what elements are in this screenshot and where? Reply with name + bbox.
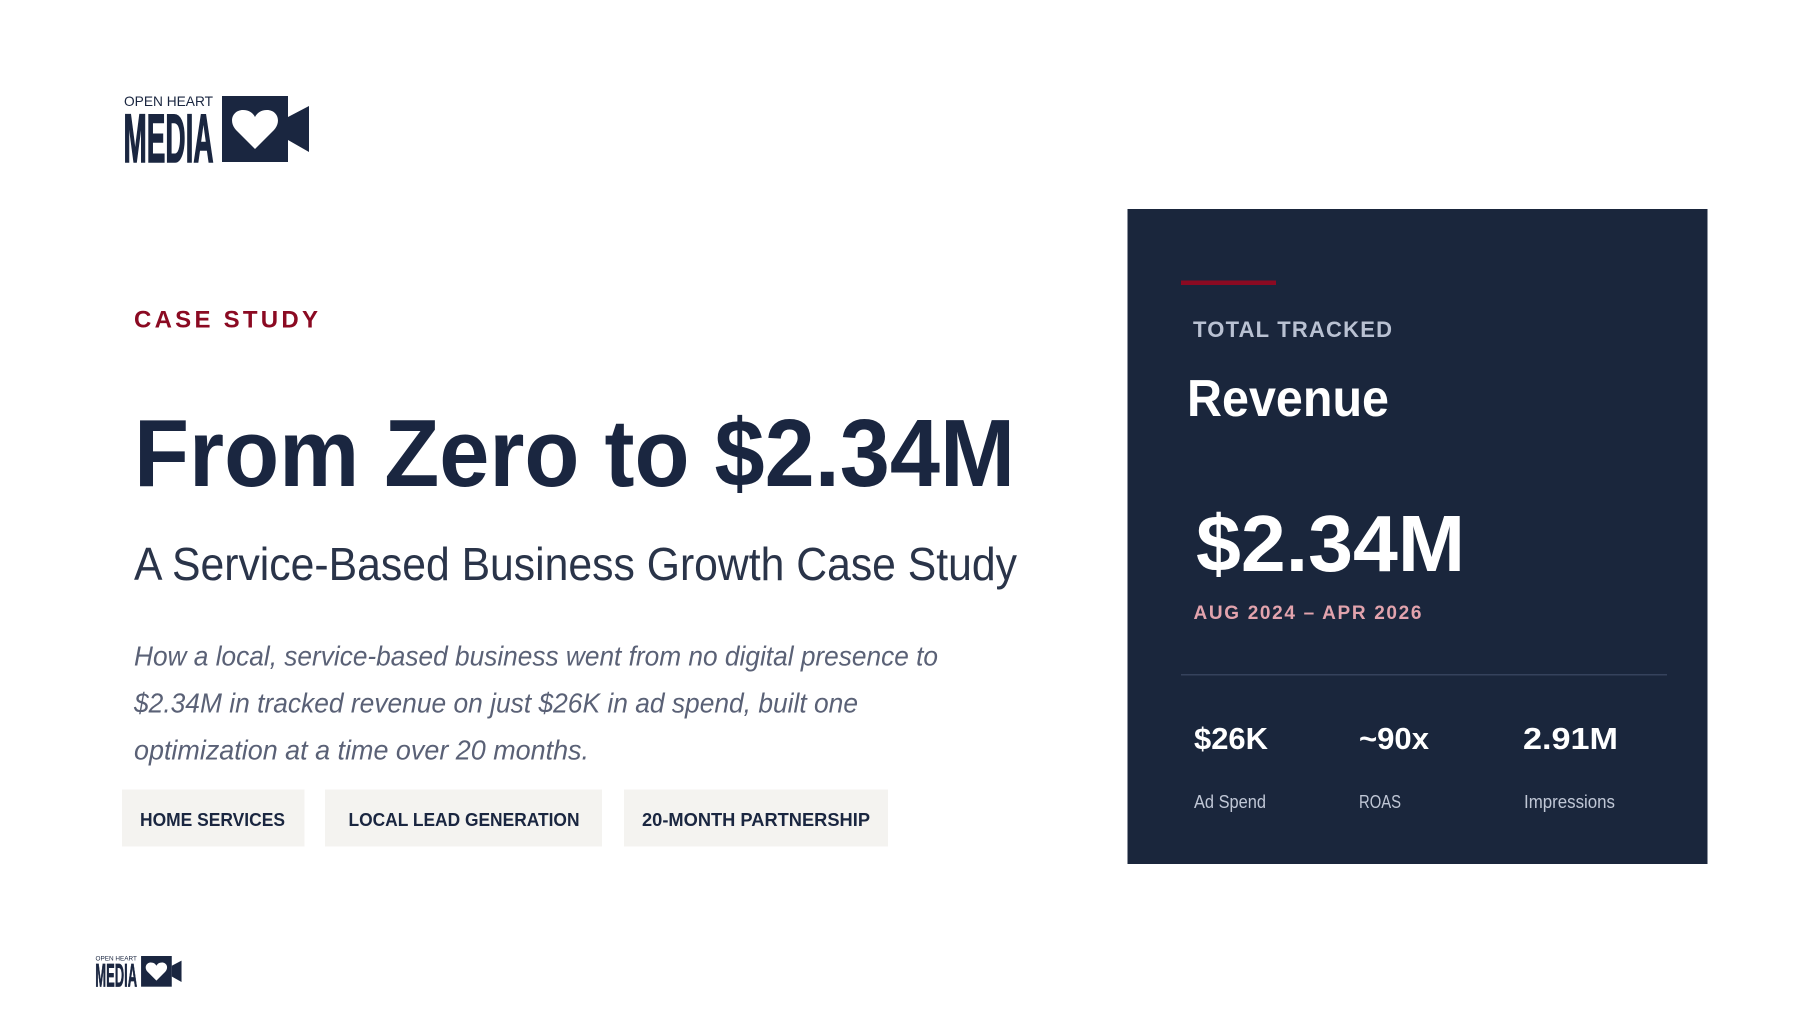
description paragraph: $2.34M in tracked revenue on just $26K in ad spend, built one — [133, 688, 858, 718]
stat: ad spend: Ad Spend — [1194, 792, 1266, 812]
title: From Zero to $2.34M — [134, 400, 1015, 507]
panel heading: Revenue — [1187, 370, 1389, 428]
icon: footer video camera with heart — [141, 956, 182, 987]
tag: 20-month partnership: 20-MONTH PARTNERSHIP — [642, 810, 870, 830]
stat: roas: ~90x — [1359, 721, 1430, 756]
footer wordmark: OPEN HEART — [96, 956, 137, 963]
tag: 20-month partnership — [624, 790, 888, 846]
tags row — [122, 790, 888, 846]
description paragraph: optimization at a time over 20 months. — [134, 734, 589, 766]
logo: Open Heart Media top: MEDIA — [124, 100, 214, 177]
stat: roas — [1359, 721, 1430, 812]
stat: ad spend — [1194, 721, 1269, 812]
stat: impressions — [1523, 721, 1618, 812]
logo wordmark: OPEN HEART — [124, 93, 213, 109]
accent bar — [1181, 280, 1276, 285]
subtitle: A Service-Based Business Growth Case Study — [134, 538, 1017, 590]
main metric: $2.34M — [1196, 499, 1465, 588]
logo: Open Heart Media footer: MEDIA — [95, 958, 137, 994]
icon: video camera with heart — [222, 96, 309, 162]
stat: ad spend: $26K — [1194, 721, 1269, 756]
panel eyebrow: TOTAL TRACKED — [1193, 317, 1392, 342]
eyebrow: case study: CASE STUDY — [134, 306, 318, 334]
logo wordmark — [124, 93, 214, 177]
stat: roas: ROAS — [1359, 792, 1401, 812]
stat: impressions: Impressions — [1524, 792, 1615, 812]
description paragraph: How a local, service-based business went from no digital presence to — [134, 640, 938, 672]
stat: impressions: 2.91M — [1523, 721, 1618, 756]
description paragraph — [133, 640, 938, 766]
footer wordmark — [95, 956, 137, 994]
tag: home services: HOME SERVICES — [140, 810, 285, 830]
tag: home services — [122, 790, 304, 846]
tag: local lead generation — [325, 790, 602, 846]
panel: total tracked revenue — [1128, 209, 1708, 864]
date range: AUG 2024 – APR 2026 — [1194, 603, 1422, 624]
tag: local lead generation: LOCAL LEAD GENERATION — [348, 810, 580, 830]
